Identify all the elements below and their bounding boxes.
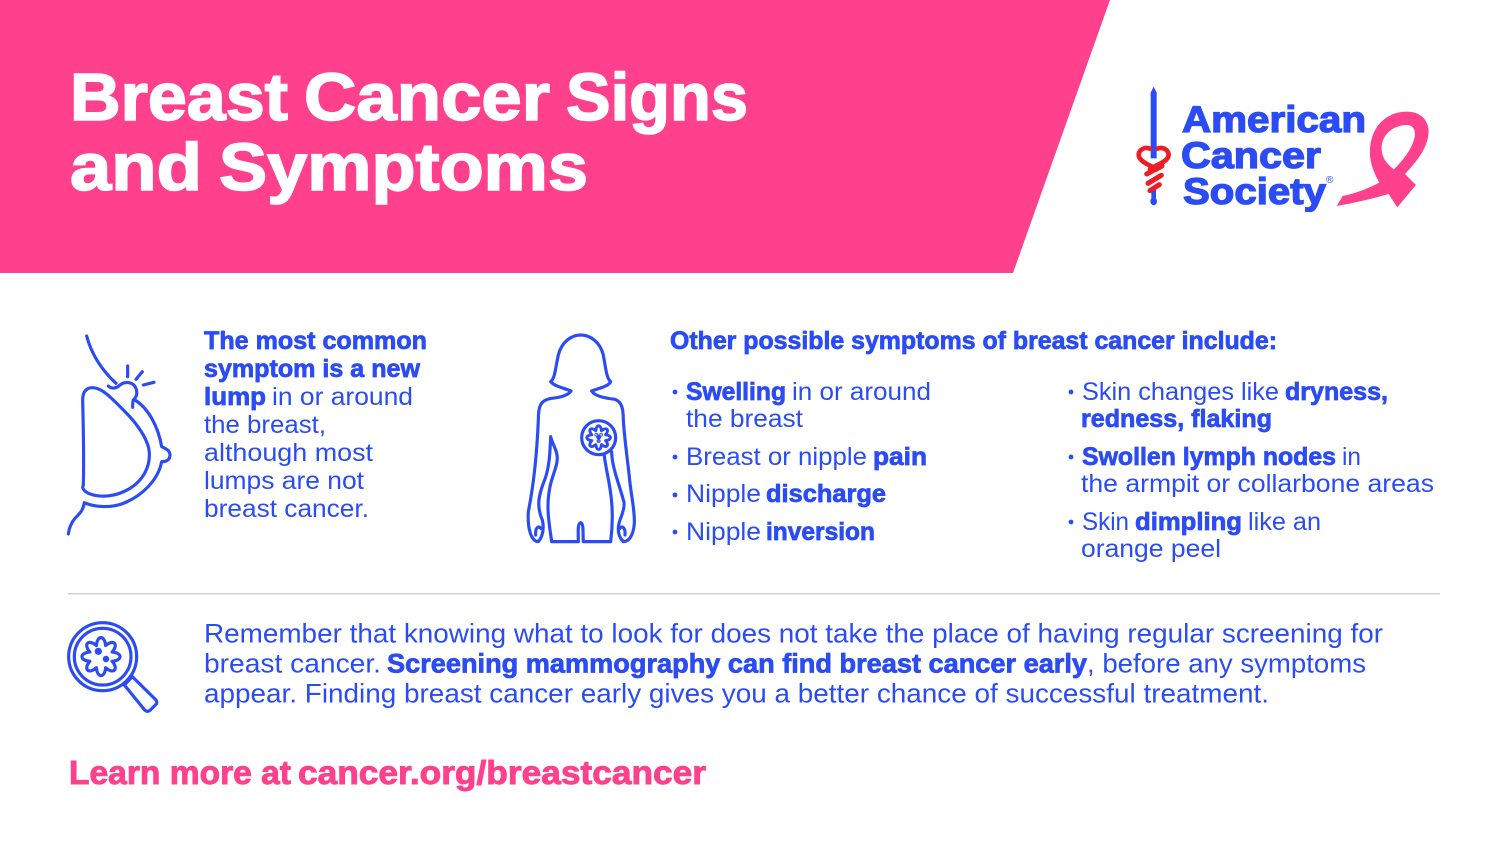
symptoms list: column one: Breast or nipple [686,443,867,471]
text: most common symptom: the breast, [204,411,326,439]
symptoms list: column two: dryness, [1285,378,1388,406]
symptoms list: column two [1069,378,1434,563]
symptoms list: column one: inversion [766,518,875,546]
symptoms list: column one: Nipple [686,480,761,508]
logo wordmark [1181,99,1366,212]
text: most common symptom: although most [204,439,373,467]
symptoms list: column two: orange peel [1081,535,1221,563]
logo wordmark: Cancer [1181,135,1321,176]
logo wordmark: American [1182,99,1366,140]
icon: breast with lump [68,336,170,534]
symptoms list: column two: like an [1248,508,1321,536]
text: most common symptom [204,327,427,523]
logo registered mark: ® [1326,175,1334,186]
logo icon: pink ribbon [1337,112,1429,207]
symptoms list: column two: Skin [1082,508,1129,536]
text: most common symptom: The most common [204,327,427,355]
screening reminder paragraph: breast cancer. [204,648,381,678]
logo icon: sword and snake [1139,87,1169,205]
title: Cancer [304,60,550,135]
title: Signs [566,60,748,135]
screening reminder paragraph: appear. Finding breast cancer early gives you a better chance of successful treatment. [204,678,1269,708]
title: Symptoms [219,130,588,205]
symptoms list: column two: in [1342,443,1361,471]
logo: American Cancer Society [1139,87,1429,212]
text: most common symptom: in or around [272,383,413,411]
screening reminder paragraph [204,618,1383,708]
symptoms list: column one: in or around [792,378,931,406]
title: Breast [70,60,288,135]
text: most common symptom: lump [204,383,266,411]
icon: magnifying glass over cell [69,623,157,711]
text: most common symptom: breast cancer. [204,495,369,523]
heading: other possible symptoms: Other possible symptoms of breast cancer include: [670,327,1277,355]
screening reminder paragraph: Remember that knowing what to look for does not take the place of having regular screening for [204,618,1383,648]
symptoms list: column two: the armpit or collarbone areas [1081,470,1434,498]
title [70,60,748,205]
symptoms list: column one: Swelling [686,378,786,406]
call to action link [69,754,706,791]
symptoms list: column one [673,378,931,546]
symptoms list: column two: Skin changes like [1082,378,1279,406]
symptoms list: column one: Nipple [686,518,761,546]
symptoms list: column one: pain [873,443,927,471]
symptoms list: column one: the breast [686,405,803,433]
screening reminder paragraph: , before any symptoms [1087,648,1366,678]
title: and [70,130,202,205]
text: most common symptom: lumps are not [204,467,364,495]
call to action link: cancer.org/breastcancer [298,754,706,791]
call to action link: Learn more at [69,754,291,791]
symptoms list: column two: Swollen lymph nodes [1082,443,1336,471]
screening reminder paragraph: Screening mammography can find breast cancer early [387,648,1087,678]
text: most common symptom: symptom is a new [204,355,421,383]
pink header banner [0,0,1110,273]
icon: body silhouette with affected cell [528,335,634,542]
symptoms list: column one: discharge [766,480,886,508]
symptoms list: column two: dimpling [1135,508,1242,536]
logo wordmark: Society [1183,171,1326,212]
symptoms list: column two: redness, flaking [1081,405,1272,433]
